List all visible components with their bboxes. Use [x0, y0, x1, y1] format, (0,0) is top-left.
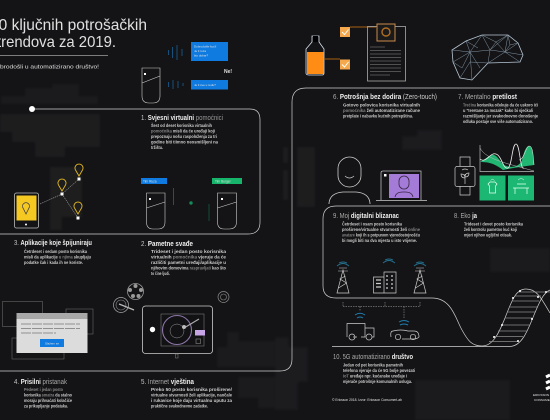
- trend 5: heading and text: [141, 379, 233, 408]
- trend 5: heading and text: 5. Internet vještina: [141, 379, 194, 386]
- trend 3: heading and text: Četrdeset i sedam posto korisnika: [24, 249, 88, 254]
- icon: voice assistant conversation: [142, 42, 232, 103]
- trend 9: heading and text: proširene/virtualne stvarnosti želi online: [342, 227, 421, 232]
- icon: smart devices arguing: Tim Ruza: [143, 180, 157, 184]
- icon: wireframe brain: [452, 35, 523, 80]
- trend 3: heading and text: podatke čak i kada ih ne koriste.: [24, 260, 83, 265]
- subtitle: brodošli u automatizirano društvo!: [0, 64, 100, 70]
- trend 10: heading and text: mjerače potrošnje komunalnih usluga.: [343, 379, 412, 384]
- title: trendova za 2019.: [0, 34, 116, 51]
- trend 4: heading and text: moraju prihvaćati kolačiće: [24, 398, 73, 403]
- trend 1: heading and text: prepoznaju nošu raspoloženja za tri: [151, 134, 217, 139]
- trend 2: heading and text: njihovim domovima raspravljati kao što: [151, 266, 226, 270]
- trend 10: heading and text: [333, 354, 415, 384]
- icon: voice assistant conversation: Dobrodošle kući!: [194, 44, 217, 48]
- icon: voice assistant conversation: bio dobar?: [194, 54, 209, 58]
- trend 6: heading and text: pretplate i nabavku kućnih potrepština.: [343, 114, 413, 118]
- icon: voice assistant conversation: Je li ruza: [194, 49, 206, 53]
- trend 7: heading and text: razmišljanje jer svakodnevno donošenje: [463, 114, 539, 118]
- trend 8: heading and text: [454, 213, 524, 238]
- trend 4: heading and text: [14, 379, 73, 408]
- icon: spying apps map: [14, 164, 83, 228]
- trend 1: heading and text: tržištu.: [151, 145, 163, 150]
- trend 3: heading and text: misli da aplikacije u njima skupljaju: [24, 254, 91, 260]
- trend 4: heading and text: za prikupljanje podataka.: [24, 404, 68, 408]
- trend 1: heading and text: Šest od deset korisnika virtualnih: [151, 123, 212, 128]
- trend 10: heading and text: telefona vjeruje da će 5G bolje povezati: [343, 368, 415, 373]
- trend 9: heading and text: avatare koji ih s potpunom vjerodostojnošću: [342, 232, 420, 238]
- footer copyright: © Ericsson 2018. Izvor: Ericsson ConsumerLab: [332, 398, 402, 402]
- icon: voice assistant conversation: Ne!: [224, 69, 232, 75]
- trend 2: heading and text: virtualnih pomoćnika vjeruje da će: [151, 254, 227, 260]
- trend 7: heading and text: [458, 94, 539, 124]
- trend 1: heading and text: [141, 115, 223, 150]
- trend 9: heading and text: Četrdeset i osam posto korisnika: [342, 222, 403, 226]
- icon: smartwatch with plant: [455, 157, 475, 195]
- trend 6: heading and text: Gotovo polovica korisnika virtualnih: [343, 102, 421, 108]
- icon: smart devices arguing: Tim Burger: [215, 180, 232, 184]
- trend 10: heading and text: 10. 5G automatizirano društvo: [333, 354, 413, 361]
- trend 9: heading and text: [333, 213, 421, 243]
- trend 1: heading and text: 1. Svjesni virtualni pomoćnici: [141, 115, 223, 122]
- trend 4: heading and text: Pedeset i jedan posto: [24, 387, 63, 392]
- trend 6: heading and text: [333, 94, 437, 118]
- trend 8: heading and text: želi kontrolu pametno kuć koji: [464, 227, 517, 232]
- trend 4: heading and text: korisnika smatra da stalno: [24, 392, 72, 398]
- trend 7: heading and text: odluka postaje sve više automatizirano.: [463, 119, 533, 124]
- background blocks: [0, 84, 550, 420]
- trend 8: heading and text: Trideset i devet posto korisnika: [464, 222, 524, 226]
- trend 10: heading and text: Jedan od pet korisnika pametnih: [343, 362, 403, 368]
- trend 5: heading and text: Preko 50 posto korisnika proširene/: [151, 387, 233, 392]
- icon: voice assistant conversation: Je li sve u redu?: [194, 83, 216, 87]
- trend 9: heading and text: 9. Moj digitalni blizanac: [333, 213, 399, 220]
- trend 1: heading and text: pomoćnika misli da će uređaji koji: [151, 128, 215, 134]
- trend 5: heading and text: virtualne stvarnosti želi aplikacije, naočale: [151, 392, 233, 398]
- icon: consent dialog: Slažem se: [45, 342, 59, 346]
- trend 2: heading and text: 2. Pametne svađe: [141, 241, 193, 248]
- trend 6: heading and text: pomoćnika želi automatizirane račune: [343, 108, 421, 113]
- icon: smart devices arguing: [141, 178, 242, 229]
- icon: consent dialog: [2, 302, 93, 359]
- trend 9: heading and text: bi mogli biti na dva mjesta u isto vrijeme.: [342, 238, 417, 243]
- icon: 5G network towers and vehicles: [337, 259, 426, 340]
- trend 5: heading and text: praktične svakodnevne zadatke.: [151, 404, 208, 408]
- trend 5: heading and text: i rukavice koje daju virtualnu uputu za: [151, 398, 233, 403]
- trend 7: heading and text: 7. Mentalno pretilost: [458, 94, 518, 101]
- trend 3: heading and text: [14, 240, 92, 265]
- connector lines: [0, 88, 550, 371]
- trend 8: heading and text: 8. Eko ja: [454, 213, 477, 220]
- icon: green tiles: [480, 176, 534, 200]
- trend 7: heading and text: Trećina korisnika očekuje da će uskoro ići: [463, 102, 538, 108]
- icon: bottle with checkboxes and contract: [306, 24, 406, 81]
- trend 8: heading and text: mjeri njihov ugljični otisak.: [464, 232, 512, 238]
- trend 2: heading and text: Trideset i jedan posto korisnika: [151, 249, 227, 254]
- trend 1: heading and text: godine biti tiimno neosmišljeni na: [151, 140, 219, 144]
- trend 7: heading and text: u "teretane za mozak" kako bi sjećkali: [463, 108, 533, 113]
- icon: person and purple laptop: [329, 157, 427, 204]
- trend 6: heading and text: 6. Potrošnja bez dodira (Zero-touch): [333, 94, 437, 101]
- Ericsson logo: [533, 375, 550, 402]
- trend 2: heading and text: različiti pametni uređaji/aplikacije u: [151, 260, 227, 265]
- title: [0, 17, 147, 51]
- icon: 5G wave with bars: [489, 290, 550, 342]
- trend 3: heading and text: 3. Aplikacije koje špijuniraju: [14, 240, 92, 247]
- chart: wave lines with green fill: [480, 144, 534, 172]
- trend 2: heading and text: to čine ljudi.: [151, 271, 170, 276]
- Ericsson logo: ERICSSON: [533, 393, 549, 397]
- trend 2: heading and text: [141, 241, 227, 276]
- subtitle: [0, 55, 108, 70]
- trend 4: heading and text: 4. Prisilni pristanak: [14, 379, 67, 386]
- icon: tablet with record player: [114, 284, 229, 358]
- trend 10: heading and text: IoT uređaje npr. kućanske uređaje i: [343, 374, 407, 378]
